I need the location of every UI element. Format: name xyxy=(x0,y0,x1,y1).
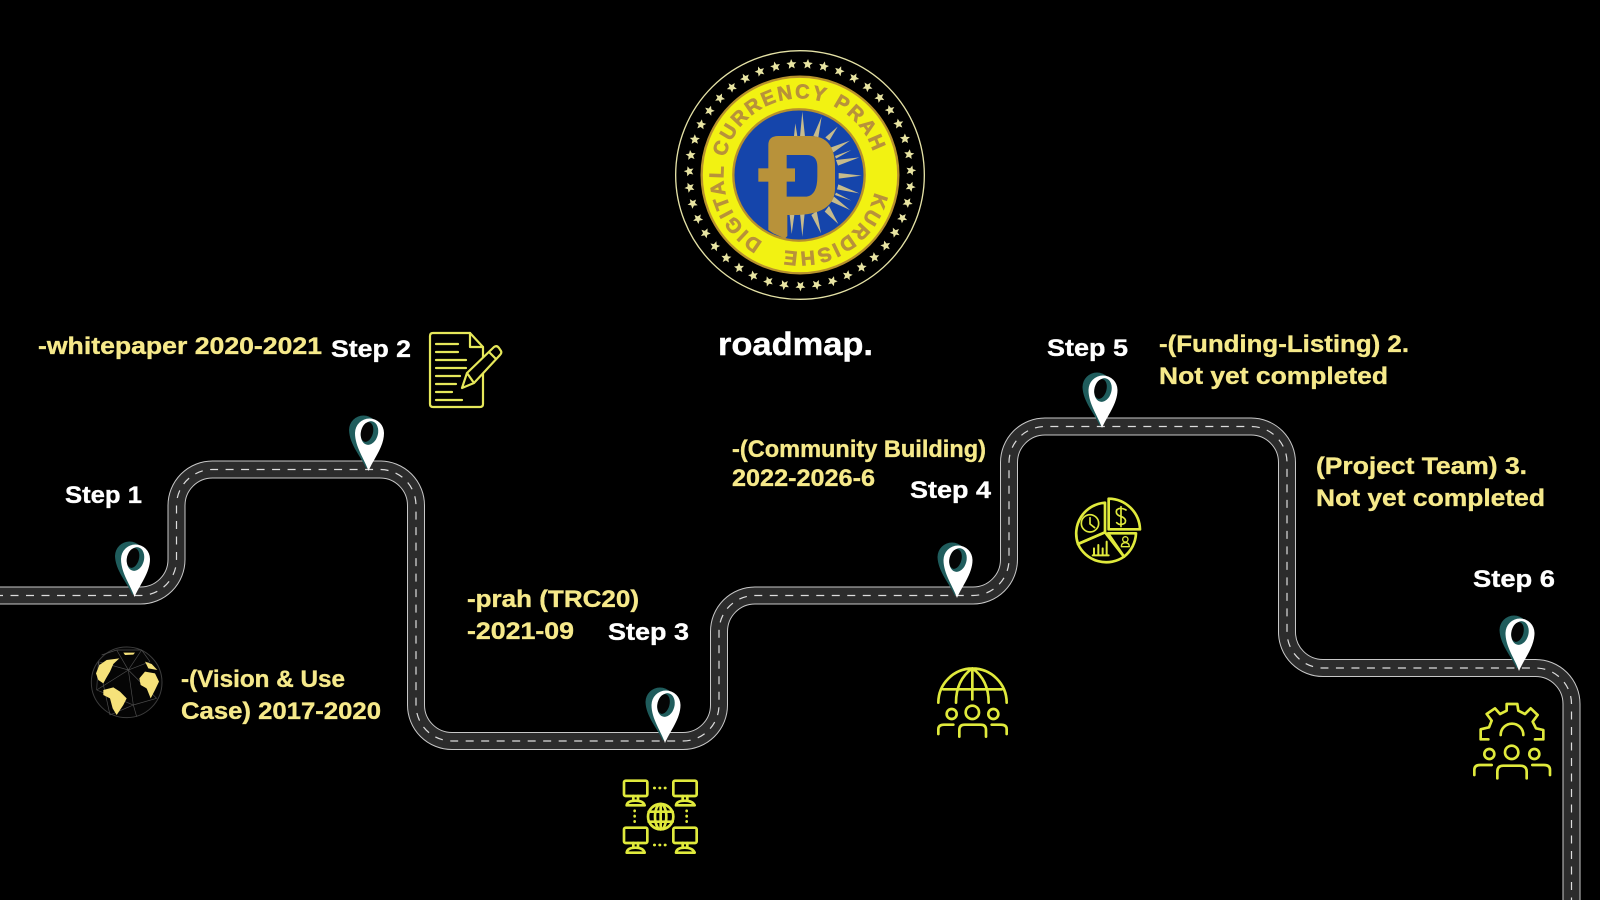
title: roadmap: roadmap. xyxy=(718,326,873,362)
icon: globe with continents xyxy=(91,647,162,718)
continents xyxy=(96,653,159,715)
pin: step 6 xyxy=(1500,616,1534,671)
text: funding listing xyxy=(1159,331,1409,390)
pin: step 3 xyxy=(646,688,680,743)
letter P xyxy=(768,136,835,239)
coin lettering: KURDISHE xyxy=(784,193,888,266)
coin lettering: DIGITAL CURRENCY PRAH xyxy=(709,84,886,254)
step 2 label: Step 2 xyxy=(331,336,411,363)
text: prah TRC20 xyxy=(467,586,639,645)
road xyxy=(0,426,1572,900)
icon: document and pen xyxy=(430,333,501,407)
icon: network of computers xyxy=(624,781,697,853)
text: community building: 2022-2026-6 xyxy=(732,465,875,492)
pin: step 2 xyxy=(349,416,384,471)
text: vision and use case: -(Vision & Use xyxy=(181,666,345,693)
network lines xyxy=(97,650,157,717)
step 3 label: Step 3 xyxy=(608,619,689,646)
text: vision and use case: Case) 2017-2020 xyxy=(181,698,381,725)
logo: Kurdishe digital currency PRAH coin xyxy=(675,50,925,300)
icon: pie chart with money, clock and bars xyxy=(1076,499,1140,562)
step 4 label: Step 4 xyxy=(910,477,992,504)
text: funding listing: -(Funding-Listing) 2. xyxy=(1159,331,1409,358)
text: community building xyxy=(732,436,986,492)
step 1 label: Step 1 xyxy=(65,482,142,509)
text: funding listing: Not yet completed xyxy=(1159,363,1388,390)
text: whitepaper: -whitepaper 2020-2021 xyxy=(38,333,322,360)
text: project team: (Project Team) 3. xyxy=(1316,453,1527,480)
step 6 label: Step 6 xyxy=(1473,566,1555,593)
icon: globe and community xyxy=(938,668,1007,737)
text: community building: -(Community Building) xyxy=(732,436,986,463)
text: project team: Not yet completed xyxy=(1316,485,1545,512)
text: project team xyxy=(1316,453,1545,512)
pin: step 5 xyxy=(1082,372,1118,428)
step 5 label: Step 5 xyxy=(1047,335,1128,362)
text: prah TRC20: -2021-09 xyxy=(467,618,574,645)
sun rays xyxy=(790,112,862,237)
ring of stars xyxy=(684,59,916,291)
text: prah TRC20: -prah (TRC20) xyxy=(467,586,639,613)
text: vision and use case xyxy=(181,666,381,725)
pin: step 4 xyxy=(938,542,972,598)
pin: step 1 xyxy=(115,542,150,597)
icon: gear and team xyxy=(1474,704,1550,778)
